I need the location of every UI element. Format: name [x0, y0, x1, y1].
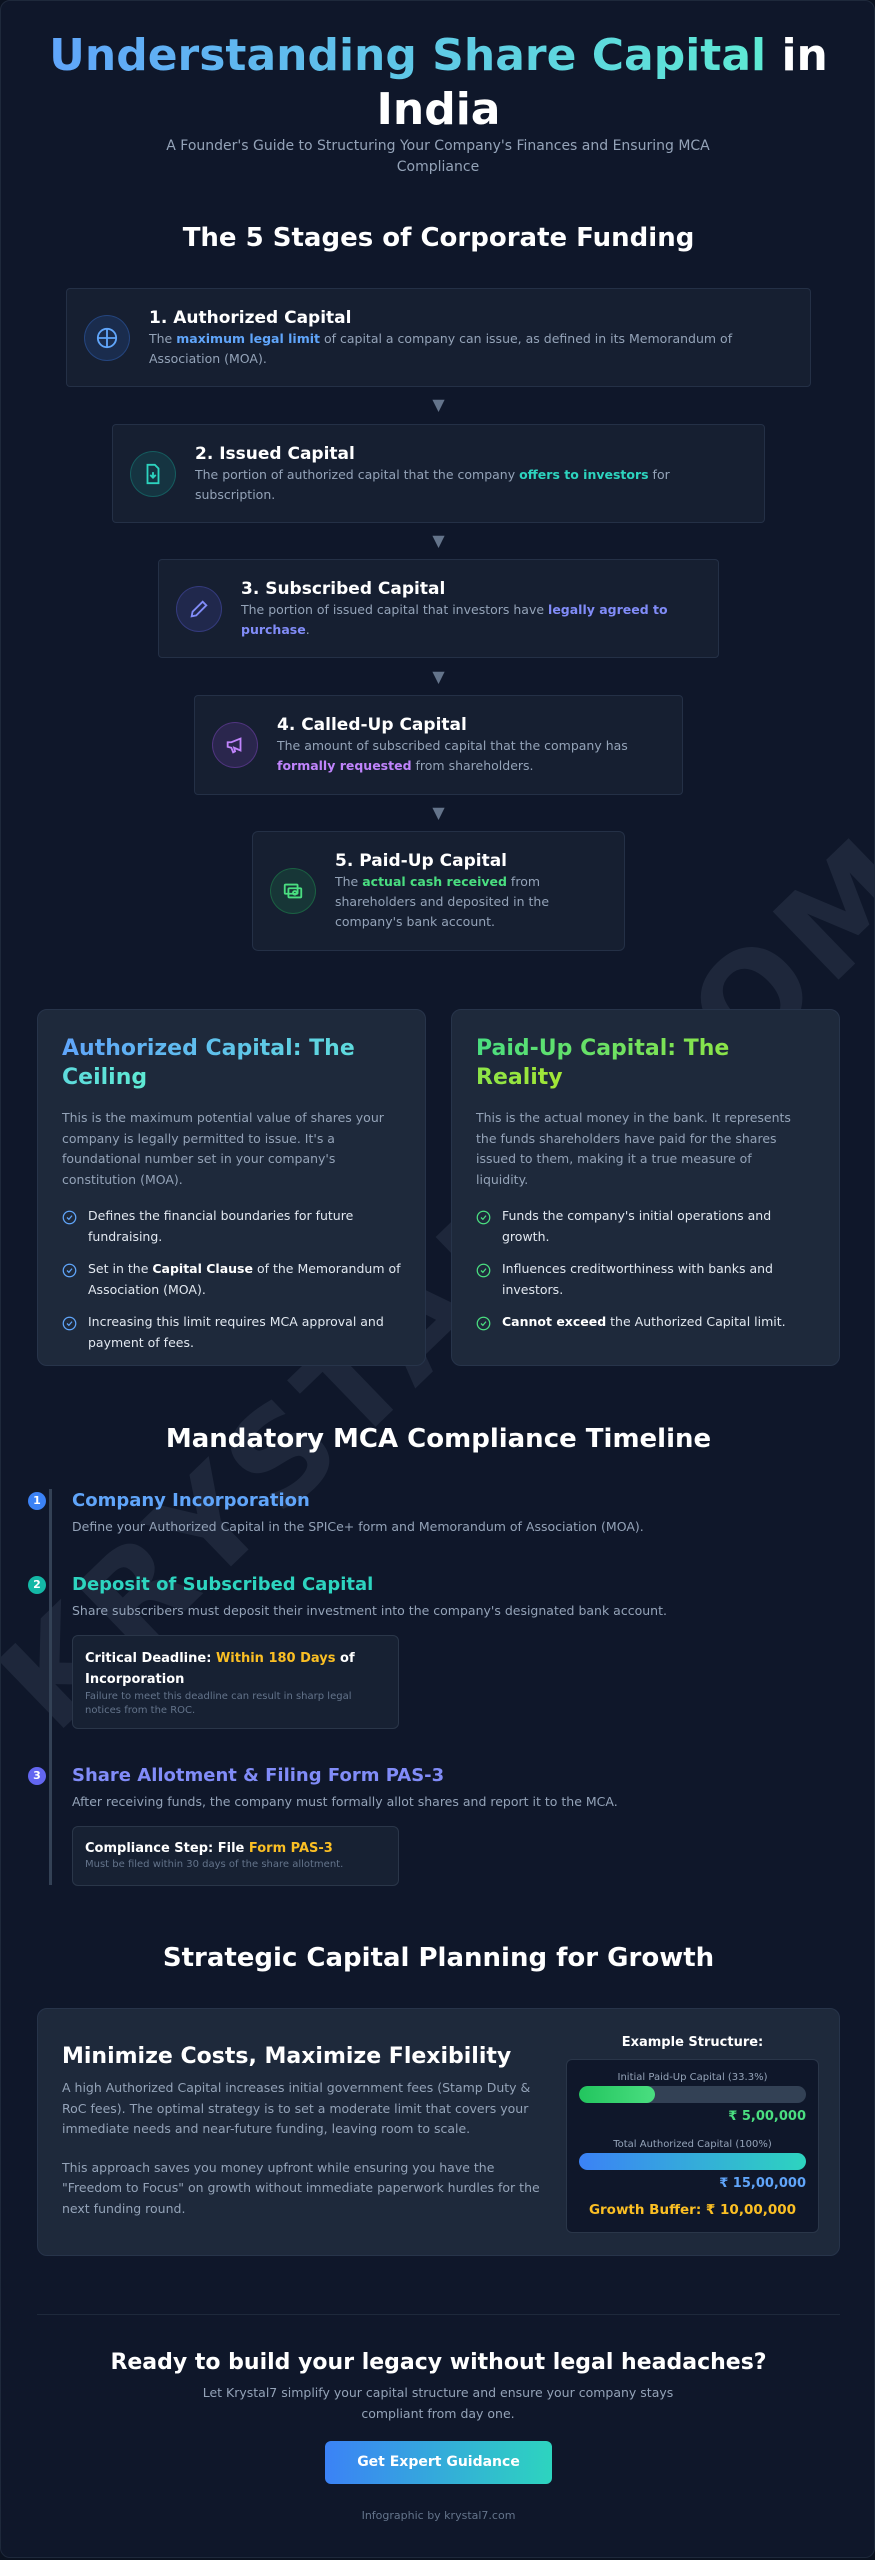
stage card 5: The actual cash received from shareholders and deposited in the company's bank account.	[335, 874, 549, 929]
step 1: 1	[33, 1494, 41, 1507]
stage card 1	[66, 288, 811, 387]
chart: example structure: ₹ 15,00,000	[719, 2176, 806, 2191]
chart: example structure: ₹ 5,00,000	[728, 2109, 806, 2124]
text block	[62, 2044, 540, 2216]
panel: authorized capital: Defines the financial boundaries for future fundraising.	[88, 1208, 353, 1244]
button	[325, 2441, 552, 2484]
callout: PAS-3	[72, 1826, 399, 1886]
heading: strategy: Strategic Capital Planning for Growth	[163, 1943, 714, 1973]
panel: paid-up capital: Funds the company's initial operations and growth.	[502, 1208, 771, 1244]
chart: example structure: Initial Paid-Up Capital (33.3%)	[618, 2072, 767, 2083]
CTA heading: Ready to build your legacy without legal headaches?	[110, 2350, 767, 2375]
stage card 4	[194, 695, 683, 795]
icon: file	[130, 451, 176, 497]
callout: deadline: Failure to meet this deadline can result in sharp legal notices from the ROC.	[85, 1691, 351, 1716]
arrow: ▼	[432, 803, 445, 822]
heading: Authorized Capital: The Ceiling	[62, 1036, 355, 1090]
stage card 2: 2. Issued Capital	[195, 444, 355, 464]
callout: PAS-3: Must be filed within 30 days of the share allotment.	[85, 1859, 343, 1870]
callout: deadline	[72, 1635, 399, 1729]
CTA text: Let Krystal7 simplify your capital structure and ensure your company stays compliant from day one.	[203, 2385, 673, 2421]
arrow: ▼	[432, 531, 445, 550]
title: Understanding Share Capital in	[49, 30, 828, 81]
arrow: ▼	[432, 667, 445, 686]
step 2	[28, 1574, 667, 1729]
timeline	[28, 1489, 667, 1886]
chart: example structure: Example Structure:	[622, 2035, 763, 2050]
panel: paid-up capital	[451, 1009, 840, 1366]
panel: authorized capital: Set in the Capital Clause of the Memorandum of Association (MOA).	[88, 1261, 401, 1296]
stage card 4: The amount of subscribed capital that the company has formally requested from shareholders.	[277, 738, 628, 773]
stage card 1: The maximum legal limit of capital a company can issue, as defined in its Memorandum of Association (MOA).	[149, 331, 732, 366]
text block: This approach saves you money upfront while ensuring you have the "Freedom to Focus" on growth without immediate paperwork hurdles for the next funding round.	[62, 2160, 540, 2216]
chart: example structure	[566, 2035, 819, 2233]
chart: example structure: Growth Buffer: ₹ 10,00,000	[589, 2202, 796, 2218]
text block: Minimize Costs, Maximize Flexibility	[62, 2044, 511, 2069]
step 3: 3	[33, 1769, 41, 1782]
stage card 2	[112, 424, 765, 523]
subtitle: A Founder's Guide to Structuring Your Company's Finances and Ensuring MCA Compliance	[166, 138, 710, 175]
panel: strategy	[37, 2008, 840, 2256]
stage card 4: 4. Called-Up Capital	[277, 715, 467, 735]
step 2: 2	[33, 1578, 41, 1591]
callout: PAS-3: Compliance Step: File Form PAS-3	[85, 1841, 333, 1856]
stage card 5: 5. Paid-Up Capital	[335, 851, 507, 871]
footer: Infographic by krystal7.com	[362, 2509, 515, 2522]
step 2: Deposit of Subscribed Capital	[72, 1574, 373, 1595]
step 1	[28, 1490, 644, 1534]
panel: authorized capital: Increasing this limit requires MCA approval and payment of fees.	[88, 1314, 384, 1350]
stage card 1: 1. Authorized Capital	[149, 308, 351, 328]
heading: Paid-Up Capital: The Reality	[476, 1036, 729, 1090]
stage card 2: The portion of authorized capital that the company offers to investors for subscription.	[195, 467, 670, 502]
step 1: Define your Authorized Capital in the SPICe+ form and Memorandum of Association (MOA).	[72, 1519, 644, 1534]
panel: paid-up capital: This is the actual money in the bank. It represents the funds shareholders have paid for the shares issued to them, making it a true measure of liquidity.	[476, 1110, 791, 1186]
stage card 3: The portion of issued capital that investors have legally agreed to purchase.	[241, 602, 668, 637]
heading: 5 stages: The 5 Stages of Corporate Funding	[183, 223, 694, 253]
icon: pen	[176, 586, 222, 632]
callout: deadline: Critical Deadline: Within 180 Days of Incorporation	[85, 1651, 355, 1687]
title	[49, 30, 828, 135]
step 3: After receiving funds, the company must formally allot shares and report it to the MCA.	[72, 1794, 618, 1809]
panel: paid-up capital: Cannot exceed the Authorized Capital limit.	[502, 1314, 786, 1329]
button: Get Expert Guidance	[357, 2454, 520, 2470]
heading: timeline: Mandatory MCA Compliance Timeline	[166, 1424, 711, 1454]
icon: target	[84, 315, 130, 361]
panel: paid-up capital: Influences creditworthiness with banks and investors.	[502, 1261, 773, 1296]
chart: example structure: Total Authorized Capital (100%)	[613, 2139, 772, 2150]
panel: authorized capital: This is the maximum potential value of shares your company is legally permitted to issue. It's a foundational number set in your company's constitution (MOA).	[62, 1110, 384, 1186]
text block: A high Authorized Capital increases initial government fees (Stamp Duty & RoC fees). The optimal strategy is to set a moderate limit that covers your immediate needs and near-future funding, leaving room to scale.	[62, 2080, 530, 2136]
step 3	[28, 1765, 618, 1886]
stage card 3	[158, 559, 719, 658]
step 2: Share subscribers must deposit their investment into the company's designated bank account.	[72, 1603, 667, 1618]
icon: megaphone	[212, 722, 258, 768]
panel: authorized capital	[37, 1009, 426, 1366]
title: India	[377, 84, 500, 135]
stage card 3: 3. Subscribed Capital	[241, 579, 445, 599]
step 3: Share Allotment & Filing Form PAS-3	[72, 1765, 444, 1786]
icon: cash	[270, 868, 316, 914]
stage card 5	[252, 831, 625, 951]
step 1: Company Incorporation	[72, 1490, 310, 1511]
arrow: ▼	[432, 395, 445, 414]
